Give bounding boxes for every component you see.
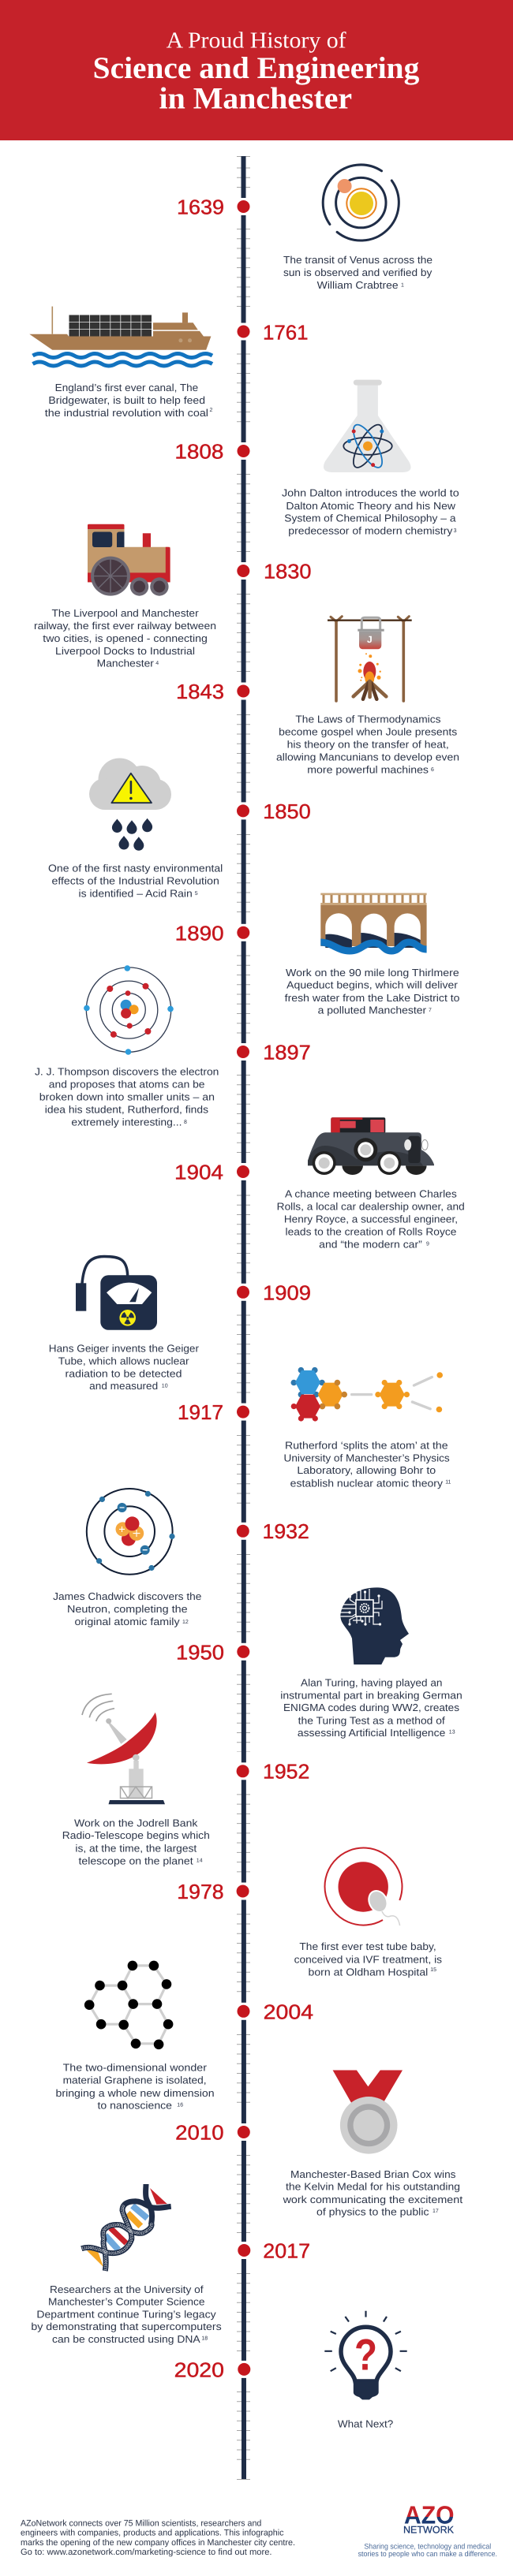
event: 1917 splitting the atom <box>178 1367 451 1489</box>
year 1843: 1843 <box>176 680 224 703</box>
text: Geiger: radiation to be detected <box>65 1367 182 1380</box>
text: Graphene: 16 <box>177 2102 183 2108</box>
text: Geiger <box>49 1342 200 1392</box>
text: electron: 8 <box>184 1120 187 1125</box>
text: DNA: Department continue Turing’s legacy <box>36 2309 216 2321</box>
title: A Proud History of <box>167 28 346 53</box>
text: Brian Cox: 17 <box>432 2209 439 2214</box>
text: acid rain: 5 <box>195 891 198 897</box>
title <box>93 28 420 115</box>
year 2010: 2010 <box>175 2121 224 2145</box>
text: DNA: 18 <box>201 2336 208 2342</box>
text: Dalton: 3 <box>454 528 457 534</box>
icon: graphene lattice <box>84 1961 173 2049</box>
icon: flask with atom <box>324 380 411 472</box>
footer: about text: AZoNetwork connects over 75 Million scientists, researchers and <box>21 2518 261 2528</box>
text: Rolls Royce: Rolls, a local car dealership owner, and <box>277 1201 465 1213</box>
text: canal: the industrial revolution with coal <box>45 407 208 419</box>
icon: vintage car <box>308 1117 434 1175</box>
text: What Next: What Next? <box>338 2418 393 2429</box>
event: 1978 first test tube baby <box>177 1848 443 1978</box>
event: 2017 DNA computing <box>31 2184 310 2345</box>
text: thermodynamics: allowing Mancunians to develop even <box>276 751 459 763</box>
icon: medal <box>333 2071 403 2154</box>
event: 1830 Liverpool and Manchester railway <box>34 524 311 669</box>
icon: warning cloud with rain <box>89 759 171 851</box>
text: Brian Cox: work communicating the excitement <box>282 2194 463 2205</box>
footer: about text: Go to: www.azonetwork.com/marketing-science to find out more. <box>21 2548 271 2557</box>
text: IVF: conceived via IVF treatment, is <box>294 1953 443 1965</box>
year 1917: 1917 <box>178 1400 223 1424</box>
icon: radio telescope <box>82 1694 165 1804</box>
text: canal: Bridgewater, is built to help feed <box>48 394 205 406</box>
text: Rolls Royce: leads to the creation of Rolls Royce <box>286 1225 456 1238</box>
text: Dalton: John Dalton introduces the world to <box>282 487 459 499</box>
text: railway <box>34 607 216 669</box>
icon: binary DNA helix: 1110001101100100011001011100010110100011001110 <box>102 2223 153 2271</box>
text: Turing: ENIGMA codes during WW2, creates <box>283 1702 460 1713</box>
icon: pot over campfire: J <box>367 634 373 645</box>
text: thermodynamics: more powerful machines <box>307 763 429 775</box>
text: Rutherford: 11 <box>445 1479 451 1486</box>
text: transit of Venus: William Crabtree <box>317 279 399 291</box>
text: Chadwick <box>53 1590 201 1627</box>
text: acid rain: effects of the Industrial Revolution <box>52 875 219 886</box>
text: DNA: can be constructed using DNA <box>52 2333 200 2345</box>
text: Geiger: and measured <box>89 1380 158 1392</box>
text: acid rain <box>48 863 223 899</box>
text: railway: Manchester <box>97 658 155 669</box>
text: aqueduct: fresh water from the Lake District to <box>285 992 459 1004</box>
text: Brian Cox: Manchester-Based Brian Cox wins <box>290 2168 456 2180</box>
text: electron: idea his student, Rutherford, finds <box>45 1104 209 1115</box>
text: Turing: Alan Turing, having played an <box>301 1677 442 1689</box>
icon: steam locomotive <box>88 524 170 596</box>
footer: about text: marks the opening of the new company offices in Manchester city centre. <box>21 2538 295 2548</box>
year 1808: 1808 <box>174 440 223 464</box>
event: 2004 Graphene <box>55 1961 313 2112</box>
event: 1843 Laws of Thermodynamics <box>176 617 459 775</box>
text: Dalton: System of Chemical Philosophy – a <box>284 513 456 524</box>
text: Graphene: bringing a whole new dimension <box>55 2087 215 2099</box>
text: DNA <box>31 2283 222 2345</box>
text: Dalton <box>282 487 459 537</box>
text: canal <box>45 382 212 419</box>
text: DNA: by demonstrating that supercomputers <box>31 2321 222 2332</box>
text: Graphene <box>55 2061 215 2112</box>
event: 1950 Turing Test <box>176 1587 462 1739</box>
text: IVF: 15 <box>430 1967 436 1973</box>
text: thermodynamics: 6 <box>431 767 434 773</box>
text: Jodrell Bank: Work on the Jodrell Bank <box>74 1817 198 1829</box>
text: electron: J. J. Thompson discovers the electron <box>35 1065 219 1077</box>
text: canal: 2 <box>210 408 213 413</box>
footer: about text <box>21 2518 295 2557</box>
text: canal: England’s first ever canal, The <box>55 382 198 393</box>
text: Rutherford: Rutherford ‘splits the atom’ at the <box>285 1439 448 1451</box>
text: aqueduct: Aqueduct begins, which will deliver <box>286 979 459 991</box>
text: Graphene: The two-dimensional wonder <box>63 2061 208 2074</box>
icon: aqueduct bridge <box>320 893 427 951</box>
text: electron: and proposes that atoms can be <box>49 1079 204 1090</box>
event: 1808 Dalton atomic theory <box>174 380 459 537</box>
year 2004: 2004 <box>264 2000 313 2023</box>
icon: cargo ship on water <box>29 307 212 366</box>
text: Turing: 13 <box>449 1730 455 1735</box>
text: electron <box>35 1065 219 1128</box>
year 1904: 1904 <box>174 1161 223 1184</box>
year 1897: 1897 <box>263 1041 311 1064</box>
text: Brian Cox: of physics to the public <box>316 2205 429 2217</box>
year 1932: 1932 <box>262 1519 309 1543</box>
text: transit of Venus: The transit of Venus across the <box>283 254 432 266</box>
footer: AZO Network logo: stories to people who can make a difference. <box>358 2550 497 2559</box>
text: Turing: the Turing Test as a method of <box>298 1714 445 1726</box>
text: railway: 4 <box>155 661 159 666</box>
icon: Geiger counter <box>76 1257 157 1330</box>
year 2017: 2017 <box>263 2239 310 2263</box>
text: Turing: instrumental part in breaking German <box>280 1689 462 1701</box>
event: 2010 Brian Cox Kelvin Medal <box>175 2071 463 2217</box>
icon: atom splitting molecules <box>290 1367 443 1422</box>
icon: binary DNA helix <box>81 2184 172 2272</box>
footer: AZO Network logo: AZO <box>404 2501 455 2529</box>
event: 1761 Bridgewater canal <box>29 307 309 419</box>
text: acid rain: is identified – Acid Rain <box>79 888 193 899</box>
text: electron: extremely interesting... <box>71 1116 182 1128</box>
event: 1639 transit of Venus <box>177 165 432 291</box>
text: thermodynamics: The Laws of Thermodynamics <box>295 713 441 725</box>
text: railway: Liverpool Docks to Industrial <box>55 645 195 657</box>
text: railway: two cities, is opened - connecting <box>43 632 208 644</box>
timeline axis <box>235 156 253 2480</box>
text: Jodrell Bank: telescope on the planet <box>79 1855 193 1867</box>
footer: AZO Network logo: Sharing science, technology and medical <box>364 2542 491 2551</box>
text: Graphene: to nanoscience <box>98 2100 172 2112</box>
text: Graphene: material Graphene is isolated, <box>63 2075 207 2086</box>
footer: AZO Network logo <box>358 2501 497 2559</box>
text: Chadwick: James Chadwick discovers the <box>53 1590 201 1602</box>
text: Brian Cox: the Kelvin Medal for his outstanding <box>286 2181 460 2193</box>
text: electron: broken down into smaller units – an <box>39 1090 215 1102</box>
text: Rolls Royce: A chance meeting between Charles <box>285 1187 457 1199</box>
text: Geiger: Hans Geiger invents the Geiger <box>49 1342 200 1355</box>
icon: binary DNA helix: 11100011000001011001110001011100010111001110 <box>82 2205 133 2255</box>
text: aqueduct: 7 <box>429 1008 432 1013</box>
text: Jodrell Bank <box>62 1817 210 1867</box>
text: Turing <box>280 1677 462 1739</box>
text: Chadwick: 12 <box>182 1620 189 1625</box>
text: transit of Venus: sun is observed and verified by <box>283 267 432 278</box>
icon: pot over campfire <box>328 617 412 701</box>
year 1639: 1639 <box>177 196 224 219</box>
text: Dalton: Dalton Atomic Theory and his New <box>286 500 456 512</box>
text: acid rain: One of the first nasty environmental <box>48 863 223 874</box>
text: transit of Venus: 1 <box>401 283 404 289</box>
text: thermodynamics: his theory on the transfer of heat, <box>287 738 449 751</box>
year 1952: 1952 <box>263 1760 309 1784</box>
text: Rolls Royce: and “the modern car” <box>319 1238 422 1250</box>
text: railway: The Liverpool and Manchester <box>52 607 199 619</box>
event: 1904 Rolls Royce <box>174 1117 465 1250</box>
event: 1897 J. J. Thompson electron <box>35 965 311 1128</box>
icon: egg and sperm <box>325 1848 403 1925</box>
text: DNA: Researchers at the University of <box>50 2283 204 2295</box>
year 1830: 1830 <box>264 560 311 583</box>
text: Rolls Royce: Henry Royce, a successful engineer, <box>284 1213 458 1225</box>
text: Geiger: 10 <box>162 1383 168 1389</box>
text: Rolls Royce <box>277 1187 465 1250</box>
text: IVF: born at Oldham Hospital <box>308 1966 428 1978</box>
year 1909: 1909 <box>263 1281 311 1304</box>
text: Rutherford: Laboratory, allowing Bohr to <box>297 1464 436 1476</box>
event: 1850 Acid Rain <box>48 759 311 899</box>
text: IVF: The first ever test tube baby, <box>299 1940 436 1952</box>
text: thermodynamics: become gospel when Joule presents <box>279 726 458 738</box>
text: Rolls Royce: 9 <box>426 1241 429 1247</box>
icon: light bulb with question mark <box>324 2311 407 2399</box>
icon: atom with electrons <box>84 965 174 1055</box>
footer: AZO Network logo: NETWORK <box>403 2525 455 2536</box>
year 1978: 1978 <box>177 1880 224 1903</box>
text: Chadwick: Neutron, completing the <box>67 1603 188 1615</box>
text: aqueduct <box>285 967 459 1016</box>
text: thermodynamics <box>276 713 459 775</box>
title: Science and Engineering <box>93 51 420 85</box>
text: Brian Cox <box>282 2168 463 2217</box>
text: Rutherford <box>284 1439 451 1489</box>
text: Dalton: predecessor of modern chemistry <box>288 525 453 537</box>
text: aqueduct: a polluted Manchester <box>318 1005 427 1016</box>
year 1850: 1850 <box>263 800 311 823</box>
text: DNA: Manchester’s Computer Science <box>48 2295 205 2307</box>
text: Jodrell Bank: 14 <box>197 1858 203 1864</box>
event: 1952 Jodrell Bank <box>62 1694 309 1867</box>
year 1950: 1950 <box>176 1640 224 1664</box>
event: 1890 Thirlmere Aqueduct <box>175 893 459 1016</box>
text: Rutherford: University of Manchester’s Physics <box>284 1452 450 1463</box>
text: Jodrell Bank: Radio-Telescope begins which <box>62 1829 210 1841</box>
year 1761: 1761 <box>263 320 308 344</box>
icon: sun and Venus orbit <box>323 165 399 240</box>
icon: head with circuit <box>340 1587 409 1665</box>
event: 2020 What Next <box>174 2311 407 2429</box>
icon: light bulb with question mark: ? <box>354 2329 377 2380</box>
footer: about text: engineers with companies, products and applications. This infographic <box>21 2529 284 2538</box>
text: aqueduct: Work on the 90 mile long Thirlmere <box>286 967 459 979</box>
text: Turing: assessing Artificial Intelligence <box>298 1727 445 1739</box>
event: 1932 James Chadwick neutron <box>53 1489 309 1627</box>
year 1890: 1890 <box>175 921 224 945</box>
text: Chadwick: original atomic family <box>74 1616 180 1627</box>
text: Rutherford: establish nuclear atomic theory <box>290 1477 444 1489</box>
title: in Manchester <box>159 82 352 115</box>
text: transit of Venus <box>283 254 432 291</box>
text: railway: railway, the first ever railway between <box>34 620 216 632</box>
header banner <box>0 0 513 140</box>
icon: atom with neutrons <box>87 1489 175 1575</box>
year 2020: 2020 <box>174 2358 224 2381</box>
text: Geiger: Tube, which allows nuclear <box>58 1355 189 1366</box>
event: 1909 Geiger Tube <box>49 1257 311 1392</box>
text: IVF <box>294 1940 443 1978</box>
text: Jodrell Bank: is, at the time, the largest <box>75 1843 197 1855</box>
